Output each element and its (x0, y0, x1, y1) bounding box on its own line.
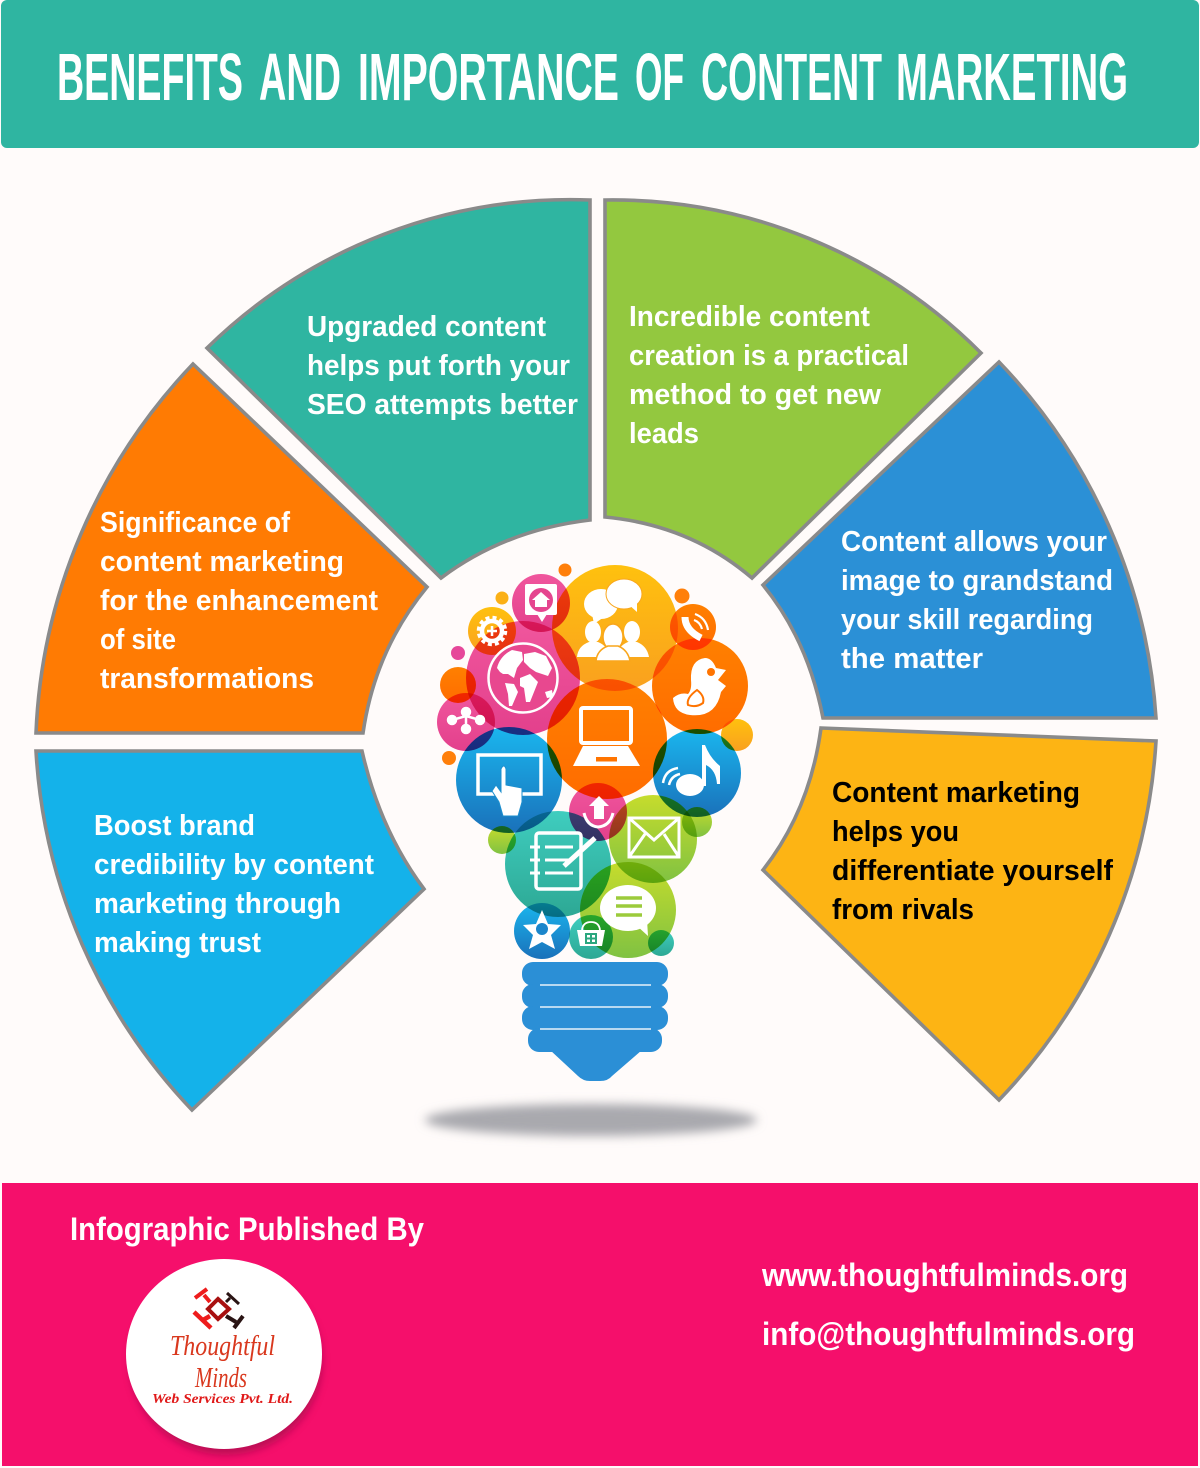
text: SEO attempts: SEO attempts better (307, 389, 578, 421)
icon: basket (577, 922, 605, 946)
title banner (1, 0, 1199, 148)
panel: differentiate (763, 728, 1156, 1100)
text: differentiate: differentiate yourself (832, 855, 1113, 887)
icon: star (523, 910, 561, 949)
text: differentiate: helps you (832, 816, 959, 848)
title: AND (259, 40, 341, 115)
logo text: Minds (194, 1363, 247, 1394)
title: IMPORTANCE (358, 40, 619, 115)
footer heading: Infographic Published By (70, 1211, 424, 1247)
icon: bird (673, 658, 726, 715)
icon: upload (584, 796, 613, 827)
logo text: Web Services Pvt. Ltd. (152, 1392, 293, 1407)
icon: chat (600, 885, 656, 936)
icon: laptop (573, 708, 640, 766)
text: site transformations: of site (100, 624, 176, 656)
logo: Thoughtful Minds (126, 1259, 322, 1455)
text: grandstand skill: image to grandstand (841, 565, 1113, 597)
panel: new leads (605, 200, 981, 578)
icon: gear (478, 618, 506, 644)
text: grandstand skill: Content allows your (841, 526, 1107, 558)
text: SEO attempts: helps put forth your (307, 350, 570, 382)
logo text (152, 1331, 293, 1407)
icon: house bubble (525, 584, 557, 622)
logo mark (194, 1289, 243, 1328)
icon: music note (663, 745, 720, 796)
text: new leads: method to get new (629, 379, 881, 411)
website address: www.thoughtfulminds.org (761, 1257, 1128, 1293)
text: grandstand skill: your skill regarding (841, 604, 1093, 636)
text: differentiate: Content marketing (832, 777, 1080, 809)
text: brand credibility: Boost brand (94, 810, 255, 842)
icon: envelope (629, 818, 679, 857)
text: grandstand skill: the matter (841, 643, 983, 675)
bulb shadow (425, 1104, 757, 1136)
icon: notebook (530, 833, 595, 889)
text: site transformations: Significance of (100, 507, 290, 539)
footer band (2, 1183, 1198, 1466)
text: site transformations: content marketing (100, 546, 344, 578)
icon: globe (488, 644, 558, 712)
title: CONTENT (701, 40, 882, 115)
text: new leads: creation is a practical (629, 340, 909, 372)
text: brand credibility: marketing through (94, 888, 341, 920)
panel: SEO attempts (207, 200, 590, 578)
light bulb illustration (437, 564, 753, 1081)
icon: touch screen (478, 755, 541, 816)
icon: phone (685, 614, 708, 638)
text: SEO attempts: Upgraded content (307, 311, 546, 343)
text: site transformations: transformations (100, 663, 314, 695)
icon: network (448, 708, 484, 733)
title: OF (635, 40, 684, 115)
text: brand credibility: making trust (94, 927, 261, 959)
logo text: Thoughtful (170, 1331, 275, 1362)
title: BENEFITS (57, 40, 243, 115)
bulb base (522, 962, 668, 1081)
panel: brand credibility (36, 751, 424, 1110)
text: new leads: leads (629, 418, 699, 450)
panel: grandstand skill (763, 362, 1156, 718)
icon: speech and people (577, 579, 649, 661)
panel: site transformations (36, 364, 427, 733)
text: new leads: Incredible content (629, 301, 870, 333)
text: differentiate: from rivals (832, 894, 974, 926)
email address: info@thoughtfulminds.org (762, 1316, 1135, 1352)
text: brand credibility: credibility by content (94, 849, 374, 881)
text: site transformations: for the enhancement (100, 585, 378, 617)
